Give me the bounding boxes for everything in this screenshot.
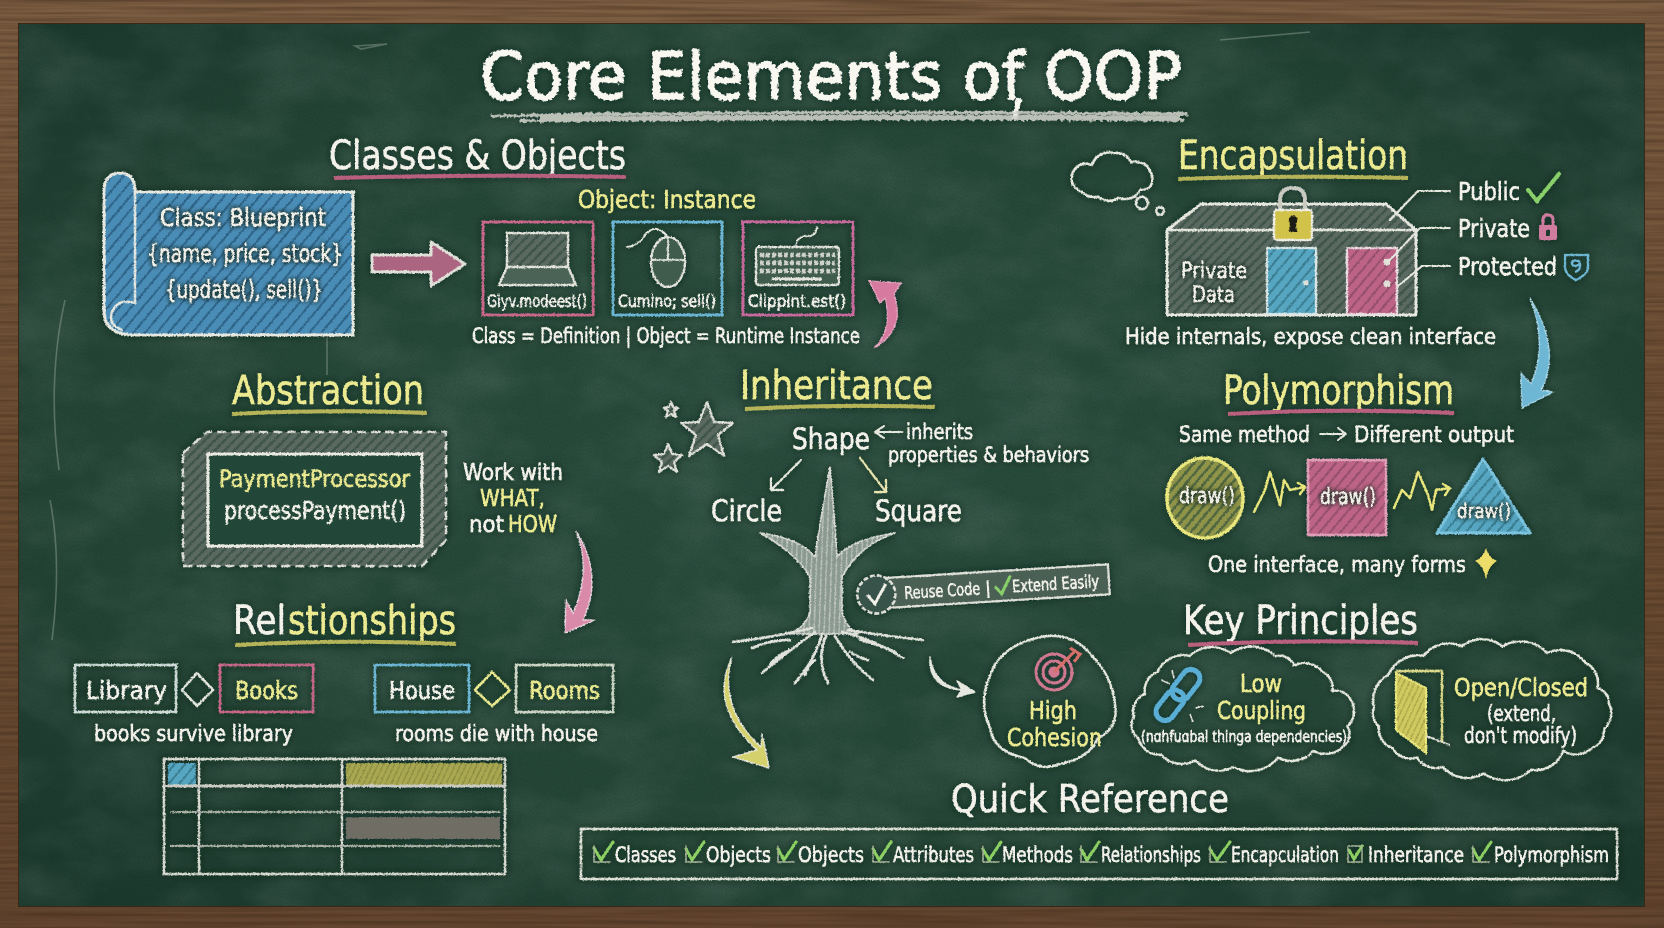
- icon: tree: [733, 467, 923, 683]
- icon: treasure chest with doors: Data: [1192, 283, 1235, 308]
- hierarchy labels: inherits: [906, 420, 973, 444]
- icon: dashed abstract box: PaymentProcessor: [219, 465, 410, 493]
- shape: triangle draw: draw(): [1457, 499, 1511, 523]
- composition: house and rooms: [375, 665, 613, 712]
- checklist box: Attributes: [893, 843, 974, 867]
- aggregation: library and books: Books: [235, 676, 298, 705]
- aggregation: library and books: Library: [86, 676, 167, 705]
- heading: polymorphism: Polymorphism: [1223, 368, 1454, 414]
- checklist box: Classes: [615, 843, 676, 867]
- heading: abstraction: Abstraction: [232, 368, 424, 414]
- hierarchy labels: properties & behaviors: [888, 443, 1089, 467]
- icons: check marks: [594, 842, 1491, 862]
- icon: dashed abstract box: processPayment(): [224, 496, 406, 525]
- icon: target: [1036, 648, 1080, 690]
- shape: square draw: draw(): [1320, 485, 1376, 510]
- caption: same method different output: Different output: [1354, 423, 1514, 448]
- heading: relationships: stionships: [288, 598, 456, 644]
- caption: books survive library: books survive library: [94, 722, 293, 747]
- panel: classes and objects: [104, 133, 901, 349]
- arrow: curved pink: [869, 281, 901, 348]
- hierarchy labels: Shape: [792, 422, 870, 456]
- badge: reuse and extend: |: [985, 579, 992, 599]
- heading: relationships: Rel: [233, 598, 286, 644]
- caption: class vs object: Class = Definition | Object = Runtime Instance: [472, 324, 860, 349]
- badge: reuse and extend: Extend Easily: [1012, 572, 1100, 597]
- hierarchy labels: [711, 420, 1089, 528]
- hierarchy labels: Square: [875, 494, 962, 528]
- icon: sparkle: [1475, 548, 1497, 579]
- panel: relationships: [75, 598, 769, 874]
- aggregation: library and books: [75, 665, 313, 712]
- principle: high cohesion: [984, 636, 1116, 767]
- checklist box: [581, 829, 1617, 879]
- principle: high cohesion: High: [1029, 696, 1077, 725]
- heading: relationships: [233, 598, 456, 645]
- card: keyboard object: [743, 222, 853, 315]
- icon: squiggle arrow two: [1394, 472, 1450, 510]
- title: Core Elements of OOP: [480, 38, 1182, 115]
- table sketch: [164, 759, 505, 874]
- arrow: class to object: [372, 242, 465, 286]
- scroll: class blueprint: {name, price, stock}: [147, 239, 343, 268]
- icon: treasure chest with doors: [1167, 188, 1416, 315]
- principle: open closed: [1373, 639, 1611, 780]
- text: work with what not how: Work with: [463, 460, 563, 486]
- principle: open closed: Open/Closed: [1454, 673, 1588, 702]
- heading: classes and objects: Classes & Objects: [329, 133, 626, 179]
- icon: pink lock: [1539, 215, 1557, 240]
- text: work with what not how: [463, 460, 563, 538]
- caption: same method different output: Same method: [1179, 423, 1310, 448]
- heading: quick reference: Quick Reference: [951, 777, 1229, 821]
- caption: same method different output: [1179, 423, 1514, 448]
- checklist box: Inheritance: [1368, 843, 1464, 867]
- icon: blue shield: [1565, 255, 1588, 280]
- checklist box: Objects: [798, 843, 864, 867]
- checklist box: Polymorphism: [1494, 843, 1609, 867]
- checklist box: Encapculation: [1231, 843, 1339, 867]
- composition: house and rooms: Rooms: [529, 676, 600, 705]
- access modifier labels: Private: [1458, 214, 1530, 243]
- panel: encapsulation: [1072, 133, 1588, 408]
- principle: low coupling: Low: [1240, 669, 1282, 698]
- access modifier labels: [1388, 174, 1588, 286]
- label: object instance: Object: Instance: [578, 185, 756, 214]
- panel: key principles: [984, 598, 1611, 780]
- checklist box: Objects: [706, 843, 771, 867]
- arrow: to high cohesion: [930, 657, 975, 697]
- shape: square draw: [1308, 460, 1386, 535]
- card: mouse object: Cumino; sell(): [618, 292, 716, 312]
- icon: thought cloud: [1072, 152, 1164, 215]
- scroll: class blueprint: [104, 173, 353, 335]
- shape: circle draw: [1167, 458, 1243, 538]
- badge: reuse and extend: Reuse Code: [904, 579, 981, 604]
- card: laptop object: Giyv.modeest(): [487, 292, 587, 312]
- caption: one interface many forms: One interface, many forms: [1208, 553, 1466, 578]
- heading: inheritance: Inheritance: [740, 363, 933, 409]
- icon: stars: [654, 402, 733, 472]
- principle: low coupling: [1132, 647, 1354, 771]
- icon: squiggle arrow one: [1254, 472, 1305, 512]
- caption: rooms die with house: rooms die with house: [395, 722, 598, 747]
- composition: house and rooms: House: [389, 676, 455, 705]
- icon: chain link: [1152, 666, 1204, 724]
- badge: reuse and extend: [856, 561, 1110, 615]
- principle: high cohesion: Cohesion: [1007, 723, 1102, 752]
- scroll: class blueprint: Class: Blueprint: [160, 203, 326, 232]
- arrow: curved pink down: [565, 531, 595, 633]
- panel: quick reference: [581, 777, 1617, 879]
- card: mouse object: [613, 222, 722, 315]
- icon: treasure chest with doors: Private: [1181, 259, 1247, 284]
- card: keyboard object: Clippint.est(): [748, 292, 846, 312]
- arrow: curved yellow: [724, 657, 769, 768]
- icon: dashed abstract box: [183, 432, 446, 566]
- access modifier labels: Public: [1458, 177, 1520, 206]
- access modifier labels: Protected: [1458, 252, 1557, 281]
- principle: low coupling: Coupling: [1217, 696, 1306, 725]
- principle: low coupling: (nɑhfuɑbal thinga dependencies): [1141, 727, 1347, 746]
- panel: polymorphism: [1167, 368, 1530, 579]
- shape: triangle draw: [1437, 459, 1530, 533]
- text: work with what not how: HOW: [508, 512, 557, 538]
- icon: door: [1396, 671, 1450, 753]
- hierarchy labels: Circle: [711, 494, 782, 528]
- text: work with what not how: WHAT,: [480, 486, 545, 512]
- panel: abstraction: [183, 368, 595, 633]
- heading: key principles: Key Principles: [1183, 598, 1418, 644]
- card: laptop object: [483, 222, 593, 315]
- text: work with what not how: not: [469, 512, 504, 538]
- checklist box: Relationships: [1101, 843, 1201, 867]
- checklist box: Methods: [1002, 843, 1073, 867]
- scroll: class blueprint: {update(), sell()}: [165, 275, 323, 304]
- heading: encapsulation: Encapsulation: [1178, 133, 1408, 179]
- caption: hide internals: Hide internals, expose clean interface: [1125, 325, 1496, 350]
- principle: open closed: don't modify): [1464, 724, 1577, 749]
- shape: circle draw: draw(): [1179, 484, 1235, 509]
- arrow: curved blue: [1521, 298, 1553, 408]
- principle: open closed: (extend,: [1487, 702, 1556, 727]
- panel: inheritance: [654, 363, 1110, 697]
- icon: green check: [1528, 174, 1559, 201]
